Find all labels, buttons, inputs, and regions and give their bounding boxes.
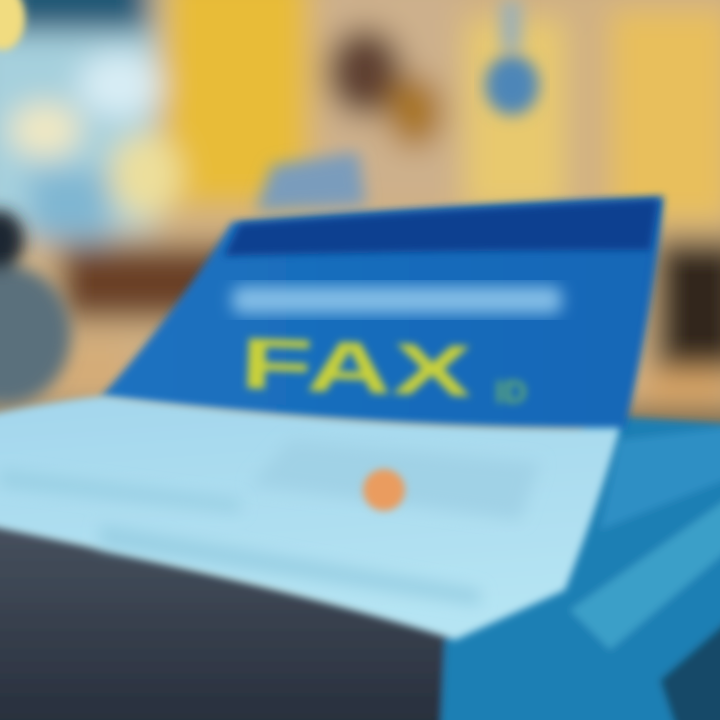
document [0, 196, 664, 640]
blurred heading text: FAX [239, 324, 473, 412]
blurred small text: ID [495, 374, 527, 410]
sphere object [0, 210, 71, 405]
front page lines [0, 470, 480, 605]
document header band [224, 200, 658, 256]
document front page [0, 396, 620, 640]
icon: corner lamp glow [0, 0, 25, 50]
background: blurred room [0, 0, 720, 410]
icon: hanging lamp [485, 0, 539, 115]
paper stack base [0, 415, 720, 720]
document back page [100, 196, 664, 430]
tab on document [255, 152, 366, 212]
orange seal [363, 469, 405, 511]
document title bar [232, 286, 562, 314]
front page panel [250, 440, 540, 520]
